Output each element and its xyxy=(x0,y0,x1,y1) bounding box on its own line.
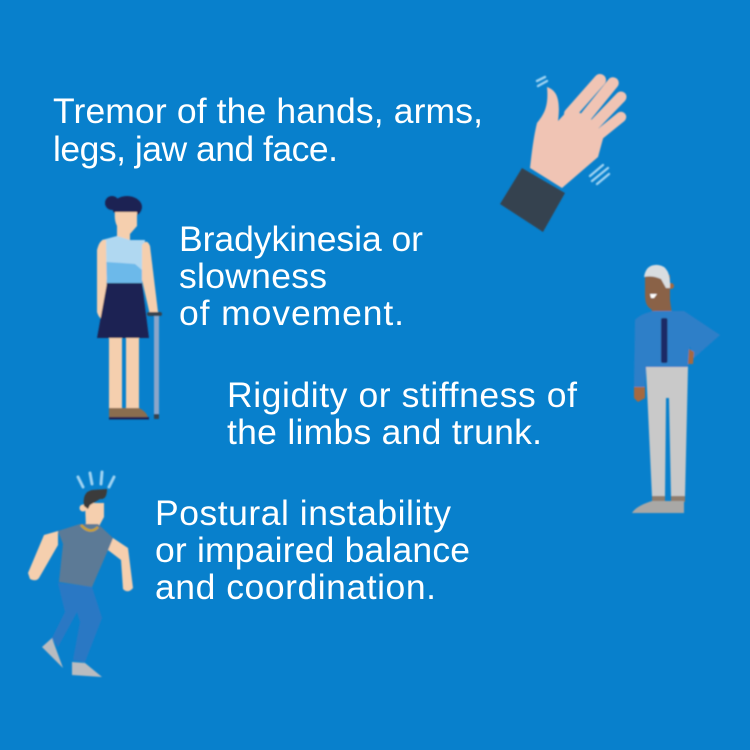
figure: unsteady man xyxy=(28,472,133,677)
text: rigidity: Rigidity or stiffness of xyxy=(227,375,577,415)
text: tremor: Tremor of the hands, arms, xyxy=(53,91,483,131)
text: postural instability xyxy=(155,493,470,607)
text: rigidity: the limbs and trunk. xyxy=(227,412,542,452)
text: bradykinesia xyxy=(179,219,423,333)
text: bradykinesia: Bradykinesia or xyxy=(179,219,423,259)
text: bradykinesia: slowness xyxy=(179,256,327,296)
text: tremor: legs, jaw and face. xyxy=(53,129,338,169)
text: postural instability: and coordination. xyxy=(155,567,436,607)
icon: shaking hand xyxy=(500,77,621,232)
text: bradykinesia: of movement. xyxy=(179,293,404,333)
text: rigidity xyxy=(227,375,577,452)
text: postural instability: Postural instability xyxy=(155,493,451,533)
figure: older man xyxy=(632,265,720,513)
text: tremor xyxy=(53,91,483,169)
text: postural instability: or impaired balance xyxy=(155,530,470,570)
figure: woman with cane xyxy=(97,196,162,420)
